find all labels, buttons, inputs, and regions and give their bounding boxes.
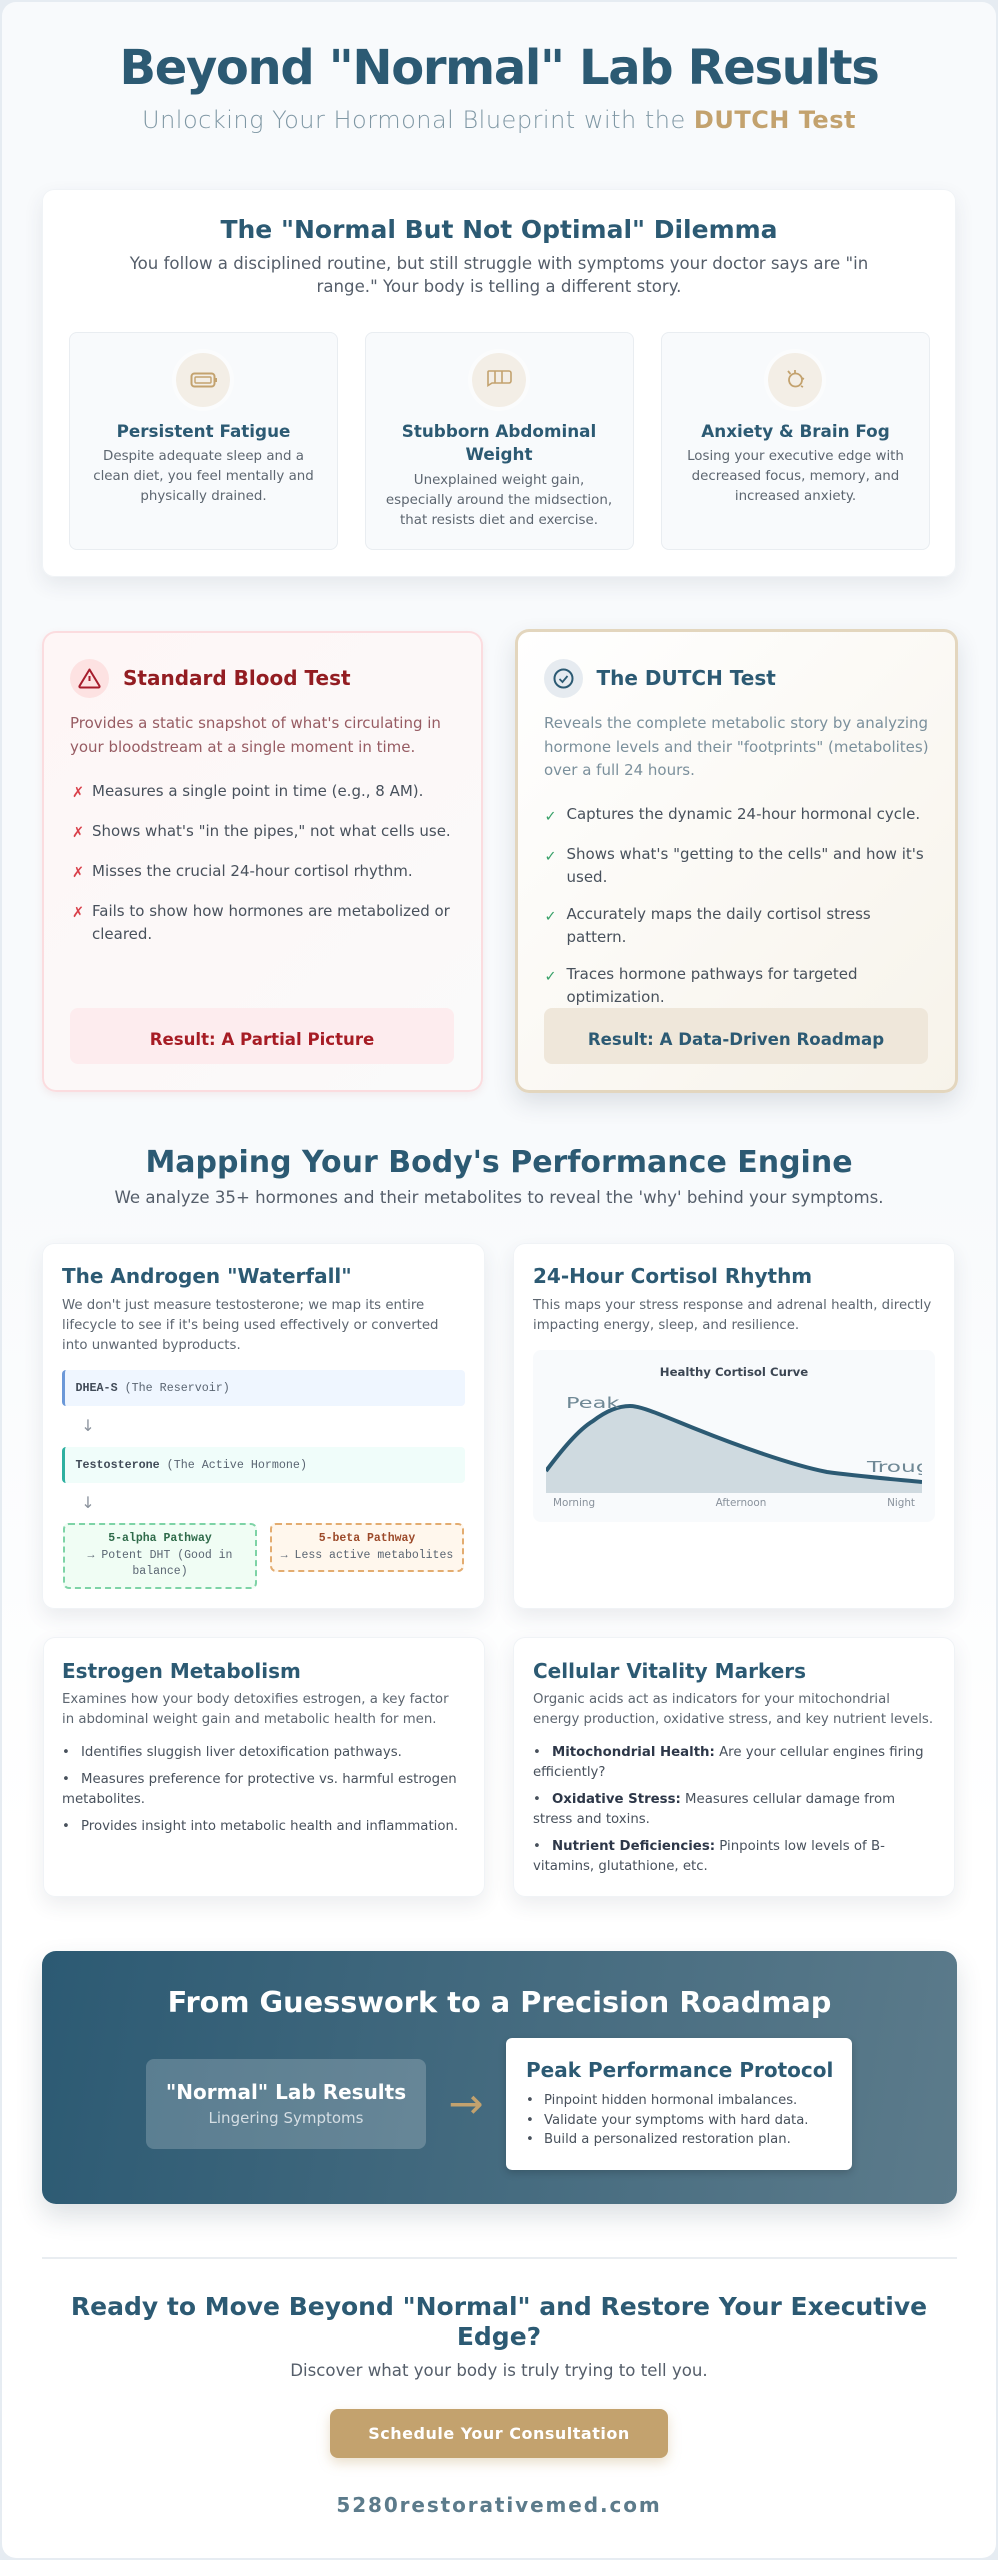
bullet 2: Oxidative Stress: Measures cellular damage from bbox=[552, 1792, 895, 1807]
benefit 3: Accurately maps the daily cortisol stress bbox=[566, 904, 871, 922]
button: Schedule Your Consultation bbox=[368, 2424, 630, 2443]
pathway: 5-alpha: balance) bbox=[132, 1565, 188, 1578]
icon: brain gear bbox=[768, 353, 822, 407]
pathway: 5-alpha: 5-alpha Pathway bbox=[108, 1532, 212, 1545]
bullet list bbox=[62, 1745, 458, 1834]
heading: Standard Blood Test bbox=[123, 666, 351, 690]
chart: healthy cortisol curve bbox=[533, 1350, 935, 1522]
result box bbox=[544, 1008, 928, 1064]
protocol list: • bbox=[526, 2113, 534, 2128]
node: testosterone bbox=[62, 1447, 465, 1483]
benefit 1: Captures the dynamic 24-hour hormonal cycle. bbox=[566, 804, 920, 822]
benefit 2: Shows what's "getting to the cells" and how it's bbox=[566, 844, 924, 862]
intro text bbox=[130, 254, 868, 296]
chart title: Healthy Cortisol Curve bbox=[660, 1365, 808, 1379]
heading: The DUTCH Test bbox=[596, 666, 776, 690]
call to action heading bbox=[71, 2292, 927, 2351]
symptom card: fatigue bbox=[69, 332, 338, 550]
symptom description: Losing your executive edge with bbox=[687, 449, 904, 464]
description: Organic acids act as indicators for your mitochondrial bbox=[533, 1692, 890, 1707]
description: over a full 24 hours. bbox=[544, 761, 695, 779]
title: Beyond "Normal" Lab Results bbox=[120, 40, 878, 96]
description: Provides a static snapshot of what's circulating in bbox=[70, 714, 441, 732]
icon: check circle bbox=[544, 659, 583, 698]
arrow: down: ↓ bbox=[81, 1416, 95, 1435]
bullet 1: Identifies sluggish liver detoxification pathways. bbox=[81, 1745, 402, 1760]
pathway: 5-beta: 5-beta Pathway bbox=[319, 1532, 415, 1545]
limitation 4: Fails to show how hormones are metabolized or bbox=[92, 902, 450, 920]
description: energy production, oxidative stress, and key nutrient levels. bbox=[533, 1712, 933, 1727]
bullet list bbox=[533, 1745, 924, 1874]
pathway: 5-alpha: → Potent DHT (Good in bbox=[88, 1548, 232, 1562]
icon: abdomen bbox=[472, 353, 526, 407]
heading: The Androgen "Waterfall" bbox=[62, 1264, 352, 1288]
website url: 5280restorativemed.com bbox=[336, 2493, 662, 2517]
intro text: range." Your body is telling a different story. bbox=[317, 277, 681, 296]
bullet 2 bbox=[533, 1792, 895, 1827]
icon: battery bbox=[176, 353, 230, 407]
symptom title: Anxiety & Brain Fog bbox=[701, 420, 890, 440]
list of limitations: ✗ bbox=[72, 824, 84, 840]
description bbox=[62, 1298, 439, 1353]
limitation 1: Measures a single point in time (e.g., 8 AM). bbox=[92, 782, 423, 800]
pathway: 5-beta bbox=[270, 1523, 464, 1572]
description: lifecycle to see if it's being used effectively or converted bbox=[62, 1318, 439, 1333]
box subtitle: Lingering Symptoms bbox=[209, 2109, 363, 2127]
subtitle: Unlocking Your Hormonal Blueprint with the DUTCH Test bbox=[142, 106, 856, 134]
call to action heading: Ready to Move Beyond "Normal" and Restore Your Executive bbox=[71, 2292, 927, 2321]
panel: cellular vitality markers bbox=[513, 1637, 955, 1897]
bullet 3: vitamins, glutathione, etc. bbox=[533, 1859, 708, 1874]
benefit 4: Traces hormone pathways for targeted bbox=[566, 964, 858, 982]
box title: Peak Performance Protocol bbox=[526, 2058, 833, 2082]
bullet 2: • bbox=[533, 1792, 541, 1807]
symptom description: physically drained. bbox=[140, 489, 267, 504]
result box bbox=[70, 1008, 454, 1064]
symptom description: Despite adequate sleep and a bbox=[103, 449, 304, 464]
description: hormone levels and their "footprints" (metabolites) bbox=[544, 738, 929, 756]
description bbox=[544, 714, 929, 779]
call to action text: Discover what your body is truly trying to tell you. bbox=[290, 2361, 708, 2380]
arrow: → bbox=[448, 2079, 484, 2128]
list of limitations: ✗ bbox=[72, 784, 84, 800]
bullet 1: Mitochondrial Health: Are your cellular engines firing bbox=[552, 1745, 924, 1760]
protocol list: Validate your symptoms with hard data. bbox=[544, 2113, 808, 2128]
result box: Result: A Data-Driven Roadmap bbox=[588, 1030, 884, 1049]
protocol list: • bbox=[526, 2093, 534, 2108]
area curve bbox=[546, 1394, 922, 1493]
bullet 1: efficiently? bbox=[533, 1765, 605, 1780]
symptom description: especially around the midsection, bbox=[386, 493, 612, 508]
benefit 4: optimization. bbox=[566, 988, 665, 1006]
pathway: 5-alpha bbox=[63, 1523, 257, 1589]
heading: dilemma: The "Normal But Not Optimal" Dilemma bbox=[220, 215, 778, 244]
bullet 3 bbox=[533, 1839, 885, 1874]
bullet 2 bbox=[62, 1772, 457, 1807]
symptom description: Unexplained weight gain, bbox=[414, 473, 584, 488]
list of benefits: ✓ bbox=[544, 968, 557, 984]
symptom title bbox=[402, 420, 596, 464]
panel: standard blood test bbox=[42, 631, 483, 1092]
node: DHEA-S bbox=[62, 1370, 465, 1406]
symptom description bbox=[386, 473, 612, 528]
result box: Result: A Partial Picture bbox=[150, 1030, 374, 1049]
symptom title: Stubborn Abdominal bbox=[402, 420, 596, 440]
bullet 2: Measures preference for protective vs. harmful estrogen bbox=[81, 1772, 457, 1787]
bullet 2: metabolites. bbox=[62, 1792, 145, 1807]
description: your bloodstream at a single moment in time. bbox=[70, 738, 415, 756]
description bbox=[532, 1298, 931, 1333]
section heading: Mapping Your Body's Performance Engine bbox=[145, 1145, 853, 1180]
call to action heading: Edge? bbox=[457, 2322, 541, 2351]
symptom card: anxiety bbox=[661, 332, 930, 550]
bullet 3: • bbox=[533, 1839, 541, 1854]
panel: DUTCH test bbox=[515, 629, 958, 1093]
bullet 2: stress and toxins. bbox=[533, 1812, 650, 1827]
axis label: afternoon: Afternoon bbox=[716, 1497, 766, 1509]
icon: warning triangle bbox=[70, 659, 109, 698]
protocol list: Pinpoint hidden hormonal imbalances. bbox=[544, 2093, 797, 2108]
description: This maps your stress response and adrenal health, directly bbox=[533, 1298, 931, 1313]
description bbox=[70, 714, 441, 756]
panel: cortisol rhythm bbox=[513, 1243, 955, 1609]
bullet 3: • bbox=[62, 1819, 70, 1834]
intro text: You follow a disciplined routine, but still struggle with symptoms your doctor says are "in bbox=[130, 254, 868, 273]
bullet 1: • bbox=[62, 1745, 70, 1760]
area curve: Peak bbox=[566, 1394, 620, 1412]
panel: normal but not optimal dilemma bbox=[42, 189, 956, 577]
symptom title: Weight bbox=[465, 444, 533, 464]
description bbox=[533, 1692, 933, 1727]
limitation 3: Misses the crucial 24-hour cortisol rhythm. bbox=[92, 862, 413, 880]
list of limitations: ✗ bbox=[72, 864, 84, 880]
description: We don't just measure testosterone; we map its entire bbox=[62, 1298, 424, 1313]
symptom description: clean diet, you feel mentally and bbox=[93, 469, 314, 484]
benefit 2 bbox=[544, 844, 924, 886]
symptom description: increased anxiety. bbox=[735, 489, 856, 504]
axis label: night: Night bbox=[887, 1497, 915, 1509]
heading: From Guesswork to a Precision Roadmap bbox=[168, 1985, 831, 2019]
pathway: 5-beta: → Less active metabolites bbox=[281, 1548, 453, 1562]
section subheading: We analyze 35+ hormones and their metabolites to reveal the 'why' behind your symptoms. bbox=[114, 1188, 884, 1207]
node: testosterone: Testosterone (The Active Hormone) bbox=[76, 1458, 307, 1472]
description: into unwanted byproducts. bbox=[62, 1338, 241, 1353]
list of limitations: ✗ bbox=[72, 904, 84, 920]
bullet 3: Nutrient Deficiencies: Pinpoints low levels of B- bbox=[552, 1839, 885, 1854]
benefit 3 bbox=[544, 904, 871, 946]
description: Examines how your body detoxifies estrogen, a key factor bbox=[62, 1692, 449, 1707]
protocol list bbox=[526, 2093, 808, 2147]
heading: Estrogen Metabolism bbox=[62, 1659, 301, 1683]
list of benefits: ✓ bbox=[544, 808, 557, 824]
limitation 2: Shows what's "in the pipes," not what cells use. bbox=[92, 822, 451, 840]
arrow: down: ↓ bbox=[81, 1493, 95, 1512]
symptom description: decreased focus, memory, and bbox=[692, 469, 899, 484]
list of benefits: ✓ bbox=[544, 908, 557, 924]
bullet 1 bbox=[533, 1745, 924, 1780]
bullet 1: • bbox=[533, 1745, 541, 1760]
node: DHEA-S: DHEA-S (The Reservoir) bbox=[76, 1381, 230, 1395]
axis label: morning: Morning bbox=[553, 1497, 595, 1509]
button bbox=[330, 2409, 668, 2458]
list of limitations bbox=[72, 782, 451, 943]
symptom description bbox=[93, 449, 314, 504]
box: peak performance protocol bbox=[506, 2038, 852, 2170]
symptom card: abdominal weight bbox=[364, 332, 634, 550]
benefit 3: pattern. bbox=[566, 928, 626, 946]
box title: "Normal" Lab Results bbox=[166, 2080, 406, 2104]
panel: estrogen metabolism bbox=[43, 1637, 485, 1897]
symptom description: that resists diet and exercise. bbox=[400, 513, 598, 528]
bullet 3: Provides insight into metabolic health and inflammation. bbox=[81, 1819, 458, 1834]
list of benefits bbox=[544, 804, 924, 1006]
heading: Cellular Vitality Markers bbox=[533, 1659, 806, 1683]
limitation 4: cleared. bbox=[92, 925, 152, 943]
panel: androgen waterfall bbox=[42, 1243, 485, 1609]
protocol list: Build a personalized restoration plan. bbox=[544, 2132, 791, 2147]
benefit 4 bbox=[544, 964, 858, 1006]
symptom description bbox=[687, 449, 904, 504]
limitation 4 bbox=[72, 902, 450, 943]
symptom title: Persistent Fatigue bbox=[117, 420, 290, 440]
description bbox=[62, 1692, 449, 1727]
box: normal lab results bbox=[146, 2059, 426, 2149]
description: Reveals the complete metabolic story by analyzing bbox=[544, 714, 928, 732]
bullet 2: • bbox=[62, 1772, 70, 1787]
panel: precision roadmap bbox=[42, 1951, 957, 2204]
list of benefits: ✓ bbox=[544, 848, 557, 864]
description: in abdominal weight gain and metabolic health for men. bbox=[62, 1712, 437, 1727]
description: impacting energy, sleep, and resilience. bbox=[533, 1318, 799, 1333]
benefit 2: used. bbox=[566, 868, 607, 886]
heading: 24-Hour Cortisol Rhythm bbox=[533, 1264, 812, 1288]
protocol list: • bbox=[526, 2132, 534, 2147]
